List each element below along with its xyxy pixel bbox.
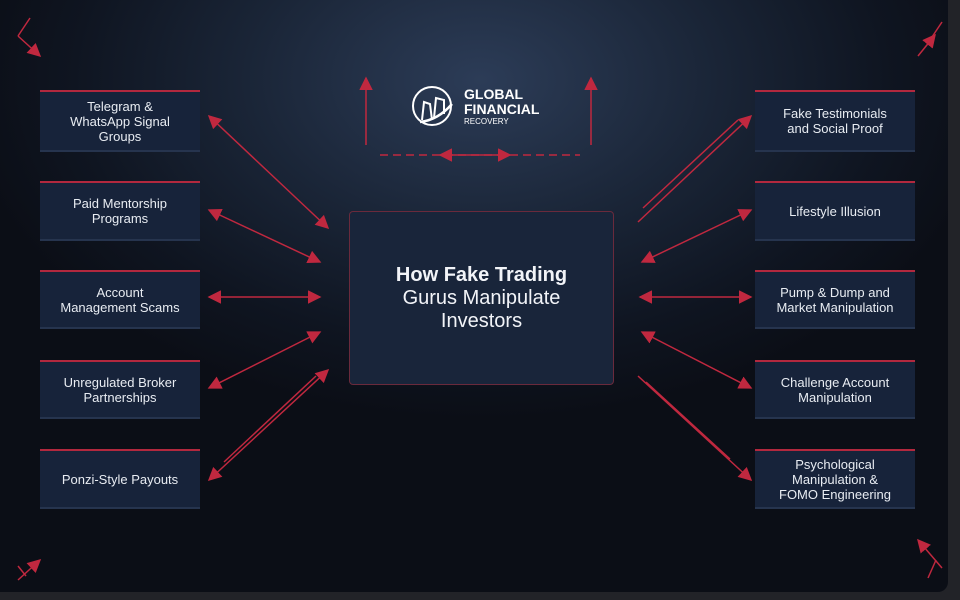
panel: center title: Investors: [441, 310, 522, 332]
panel: Paid Mentorship: [40, 181, 200, 241]
logo text: GLOBAL: [464, 86, 523, 102]
panel: center title: [349, 211, 614, 385]
panel: Fake Testimonials: Fake Testimonials and Social Proof: [783, 106, 887, 136]
panel: Pump & Dump: Pump & Dump and Market Manipulation: [776, 284, 894, 314]
logo text: FINANCIAL: [464, 101, 539, 117]
panel: Psychological: Psychological Manipulation & FOMO Engineering: [779, 456, 891, 502]
panel: center title: How Fake Trading: [396, 264, 567, 286]
panel: Psychological: [755, 449, 915, 509]
panel: Challenge Account: [755, 360, 915, 419]
panel: Paid Mentorship: Paid Mentorship Programs: [73, 196, 167, 226]
panel: Telegram: Telegram & WhatsApp Signal Groups: [70, 98, 170, 144]
panel: center title: Gurus Manipulate: [403, 286, 560, 308]
panel: Fake Testimonials: [755, 90, 915, 152]
panel: Account Management: [40, 270, 200, 329]
icon: globe: [412, 86, 453, 126]
panel: Pump & Dump: [755, 270, 915, 329]
panel: Account Management: Account Management Scams: [60, 284, 180, 314]
panel: Challenge Account: Challenge Account Manipulation: [781, 374, 889, 404]
panel: Unregulated Broker: [40, 360, 200, 419]
panel: Ponzi: Ponzi-Style Payouts: [62, 472, 178, 486]
logo: [412, 86, 539, 126]
logo text: [464, 86, 539, 126]
panel: Lifestyle: [755, 181, 915, 241]
panel: Unregulated Broker: Unregulated Broker Partnerships: [64, 374, 176, 404]
panel: Ponzi: [40, 449, 200, 509]
panel: Lifestyle: Lifestyle Illusion: [789, 204, 881, 218]
panel: Telegram: [40, 90, 200, 152]
logo text: RECOVERY: [464, 117, 509, 126]
